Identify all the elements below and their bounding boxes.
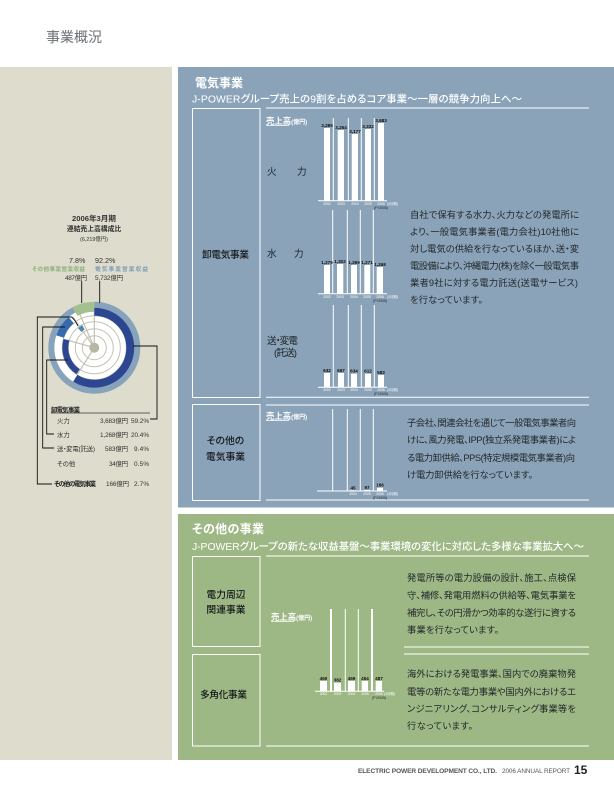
chart: transmission sales: 667 bbox=[337, 368, 345, 373]
chart: hydroelectric power sales: (FY2005) bbox=[373, 299, 387, 303]
segment labels bbox=[32, 256, 148, 282]
segment breakdown table: 2.7% bbox=[134, 481, 149, 488]
chart: transmission sales: (3月期) bbox=[387, 387, 398, 392]
box: wholesale electric power: 卸電気事業 bbox=[202, 248, 249, 261]
chart: transmission sales: (FY2005) bbox=[374, 392, 388, 396]
chart: hydroelectric power sales: 1,269 bbox=[348, 260, 360, 265]
heading: other businesses: その他の事業 bbox=[192, 521, 264, 536]
chart: transmission sales: 2004 bbox=[350, 388, 358, 392]
donut chart bbox=[39, 292, 150, 403]
chart: thermal power sales: 3,289 bbox=[321, 123, 333, 128]
chart: hydroelectric power sales: 2003 bbox=[336, 295, 344, 299]
chart: transmission sales: 612 bbox=[364, 368, 372, 374]
chart: other business sales: 2006 bbox=[375, 692, 383, 696]
text: other electric description: けに、風力発電、IPP(独立系発電事業者)によ bbox=[407, 434, 576, 445]
chart: hydroelectric power sales: 2004 bbox=[350, 295, 358, 299]
box: other electric power: 電気事業 bbox=[206, 450, 245, 463]
text: diversified description bbox=[407, 668, 577, 731]
segment breakdown table: 水力 bbox=[57, 430, 70, 439]
chart: thermal power sales: 3,683 bbox=[375, 118, 387, 123]
heading: electric power business: 電気事業 bbox=[195, 75, 243, 90]
chart: other electric power sales: 97 bbox=[364, 485, 370, 490]
segment labels: 5,732億円 bbox=[95, 273, 123, 282]
chart: thermal power sales bbox=[266, 116, 398, 210]
page title: 事業概況 bbox=[46, 29, 102, 45]
box: power-related business bbox=[192, 556, 260, 646]
leader lines bbox=[37, 281, 157, 484]
chart: hydroelectric power sales: 1,302 bbox=[334, 259, 346, 264]
text: wholesale description: 業者9社に対する電力託送(送電サービス) bbox=[410, 277, 578, 288]
chart: thermal power sales: 2002 bbox=[323, 202, 331, 206]
heading: other businesses: J-POWERグループの新たな収益基盤〜事業環境の変化に対応した多様な事業拡大へ〜 bbox=[192, 540, 584, 553]
chart: other business sales: 2002 bbox=[320, 692, 327, 696]
chart: hydroelectric power sales: 1,279 bbox=[321, 260, 333, 265]
chart: other electric power sales: 2005 bbox=[363, 492, 371, 496]
chart: other electric power sales bbox=[266, 409, 398, 500]
segment labels: 487億円 bbox=[65, 273, 87, 282]
box: diversified business bbox=[192, 654, 260, 746]
text: power-related description: 発電所等の電力設備の設計、施工、点検保 bbox=[407, 572, 577, 583]
text: other electric description bbox=[407, 417, 576, 480]
segment breakdown table: 1,268億円 bbox=[100, 430, 128, 439]
chart: thermal power sales: 3,332 bbox=[362, 124, 374, 129]
chart: thermal power sales: (FY2005) bbox=[374, 206, 388, 210]
footer: ELECTRIC POWER DEVELOPMENT CO., LTD. bbox=[358, 768, 497, 775]
chart: hydroelectric power sales: 2005 bbox=[363, 295, 371, 299]
text: diversified description: 海外における発電事業、国内での廃棄物発 bbox=[407, 668, 577, 679]
chart: hydroelectric power sales: 1,268 bbox=[374, 262, 386, 267]
chart: other electric power sales: (3月期) bbox=[387, 491, 398, 496]
box: other electric power: その他の bbox=[206, 434, 244, 447]
segment breakdown table: 166億円 bbox=[106, 479, 129, 488]
chart: hydroelectric power sales bbox=[267, 210, 398, 303]
chart: thermal power sales: 力 bbox=[297, 166, 307, 178]
chart heading: 連結売上高構成比 bbox=[67, 224, 121, 233]
chart: transmission sales: 632 bbox=[323, 368, 331, 373]
segment breakdown table: 火力 bbox=[57, 416, 70, 425]
text: wholesale description: 自社で保有する水力、火力などの発電所に bbox=[410, 209, 579, 220]
chart: thermal power sales: (3月期) bbox=[387, 201, 398, 206]
chart heading: 2006年3月期 bbox=[72, 213, 116, 223]
text: other electric description: け電力卸供給を行なっています。 bbox=[407, 469, 533, 480]
chart: transmission sales: 634 bbox=[350, 368, 358, 374]
chart: thermal power sales: 3,177 bbox=[349, 129, 361, 134]
chart: other business sales: 454 bbox=[361, 676, 369, 681]
segment breakdown table: 3,683億円 bbox=[100, 416, 128, 425]
text: diversified description: 行なっています。 bbox=[407, 720, 473, 731]
text: wholesale description: 電設備により、沖縄電力(株)を除く一般電気事 bbox=[410, 260, 579, 271]
segment breakdown table: その他 bbox=[57, 459, 76, 468]
chart: other electric power sales: 売上高(億円) bbox=[266, 411, 307, 421]
segment breakdown table: 34億円 bbox=[109, 459, 128, 468]
text: power-related description bbox=[407, 572, 577, 635]
box: wholesale electric power bbox=[192, 108, 260, 398]
box: diversified business: 多角化事業 bbox=[200, 688, 247, 701]
text: other electric description: る電力卸供給、PPS(特定規模電気事業者)向 bbox=[407, 452, 575, 463]
segment breakdown table: その他の電気事業 bbox=[54, 479, 97, 488]
chart: other business sales: 469 bbox=[348, 676, 356, 681]
chart: other business sales: 2005 bbox=[361, 692, 369, 696]
chart: other business sales: 売上高(億円) bbox=[271, 612, 312, 622]
chart: other business sales: 2004 bbox=[348, 692, 355, 696]
chart: other business sales: 2003 bbox=[334, 692, 341, 696]
chart: other business sales: (FY2005) bbox=[372, 696, 386, 700]
chart: thermal power sales: 3,254 bbox=[335, 125, 347, 130]
text: wholesale description: より、一般電気事業者(電力会社)10社他に bbox=[410, 226, 579, 237]
chart: thermal power sales: 売上高(億円) bbox=[266, 116, 307, 126]
chart: other business sales: 460 bbox=[320, 676, 328, 681]
footer: 15 bbox=[574, 763, 588, 777]
chart: other electric power sales: 2004 bbox=[349, 492, 357, 496]
segment breakdown table bbox=[51, 405, 150, 488]
chart: transmission sales bbox=[267, 305, 398, 396]
text: diversified description: ンジニアリング、コンサルティング事業等を bbox=[407, 703, 576, 714]
chart: other electric power sales: 45 bbox=[350, 486, 356, 490]
chart: thermal power sales: 2004 bbox=[351, 202, 359, 206]
chart: hydroelectric power sales: (3月期) bbox=[387, 294, 398, 299]
text: wholesale description bbox=[410, 209, 579, 305]
chart: hydroelectric power sales: 水 bbox=[267, 248, 277, 260]
chart: transmission sales: 2005 bbox=[364, 388, 372, 392]
chart: hydroelectric power sales: 2002 bbox=[323, 295, 331, 299]
panel: electric power business bbox=[178, 67, 614, 508]
heading: electric power business bbox=[192, 75, 522, 106]
text: other electric description: 子会社、関連会社を通じて一般電気事業者向 bbox=[407, 417, 576, 428]
chart: other electric power sales: (FY2005) bbox=[373, 496, 387, 500]
footer: 2006 ANNUAL REPORT bbox=[502, 768, 570, 775]
segment labels: その他事業営業収益 bbox=[32, 265, 85, 273]
segment labels: 電気事業営業収益 bbox=[95, 265, 148, 273]
segment breakdown table: 9.4% bbox=[134, 446, 149, 453]
segment breakdown table: 送・変電(託送) bbox=[57, 444, 95, 453]
segment breakdown table: 583億円 bbox=[105, 444, 128, 453]
segment breakdown table: 0.5% bbox=[134, 461, 149, 468]
chart: other electric power sales: 2006 bbox=[376, 492, 384, 496]
segment breakdown table: 59.2% bbox=[131, 418, 149, 425]
chart: other business sales: 382 bbox=[334, 678, 342, 683]
chart: transmission sales: 2006 bbox=[377, 388, 385, 392]
chart: hydroelectric power sales: 2006 bbox=[376, 295, 384, 299]
box: power-related business: 関連事業 bbox=[206, 603, 246, 616]
text: power-related description: 事業を行なっています。 bbox=[407, 624, 499, 635]
segment labels: 7.8% bbox=[69, 256, 86, 265]
footer bbox=[358, 763, 588, 777]
chart: other business sales bbox=[271, 609, 395, 700]
chart: thermal power sales: 2006 bbox=[377, 202, 385, 206]
panel lines bbox=[266, 556, 589, 746]
chart: other electric power sales: 166 bbox=[376, 482, 384, 488]
box: power-related business: 電力周辺 bbox=[206, 588, 246, 601]
chart: transmission sales: 送・変電 bbox=[267, 335, 298, 347]
segment breakdown table: 卸電気事業 bbox=[51, 405, 81, 414]
chart: other business sales: (3月期) bbox=[384, 691, 395, 696]
text: wholesale description: 対し電気の供給を行なっているほか、送・変 bbox=[410, 243, 579, 254]
chart: thermal power sales: 2003 bbox=[337, 202, 345, 206]
segment breakdown table: 20.4% bbox=[131, 432, 149, 439]
heading: other businesses bbox=[192, 521, 584, 553]
chart: other business sales: 487 bbox=[375, 676, 383, 681]
text: wholesale description: を行なっています。 bbox=[410, 294, 483, 305]
chart: hydroelectric power sales: 力 bbox=[294, 248, 304, 260]
panel lines bbox=[266, 108, 589, 500]
panel: other businesses bbox=[178, 514, 614, 760]
chart: transmission sales: (託送) bbox=[274, 347, 297, 359]
panel: consolidated sales composition bbox=[0, 67, 172, 760]
text: power-related description: 補完し、その円滑かつ効率的な遂行に資する bbox=[407, 607, 576, 618]
segment labels: 92.2% bbox=[95, 256, 116, 265]
chart: transmission sales: 2002 bbox=[323, 388, 331, 392]
text: diversified description: 電等の新たな電力事業や国内外におけるエ bbox=[407, 686, 576, 697]
chart: transmission sales: 2003 bbox=[337, 388, 345, 392]
chart: hydroelectric power sales: 1,271 bbox=[361, 260, 373, 265]
chart: thermal power sales: 2005 bbox=[364, 202, 372, 206]
heading: electric power business: J-POWERグループ売上の9割を占めるコア事業〜一層の競争力向上へ〜 bbox=[192, 92, 522, 106]
chart heading bbox=[67, 213, 121, 243]
box: other electric power bbox=[192, 404, 260, 500]
text: power-related description: 守、補修、発電用燃料の供給等、電気事業を bbox=[407, 590, 576, 600]
chart: thermal power sales: 火 bbox=[267, 167, 277, 178]
chart: transmission sales: 583 bbox=[377, 370, 385, 375]
chart heading: (6,219億円) bbox=[80, 235, 108, 243]
